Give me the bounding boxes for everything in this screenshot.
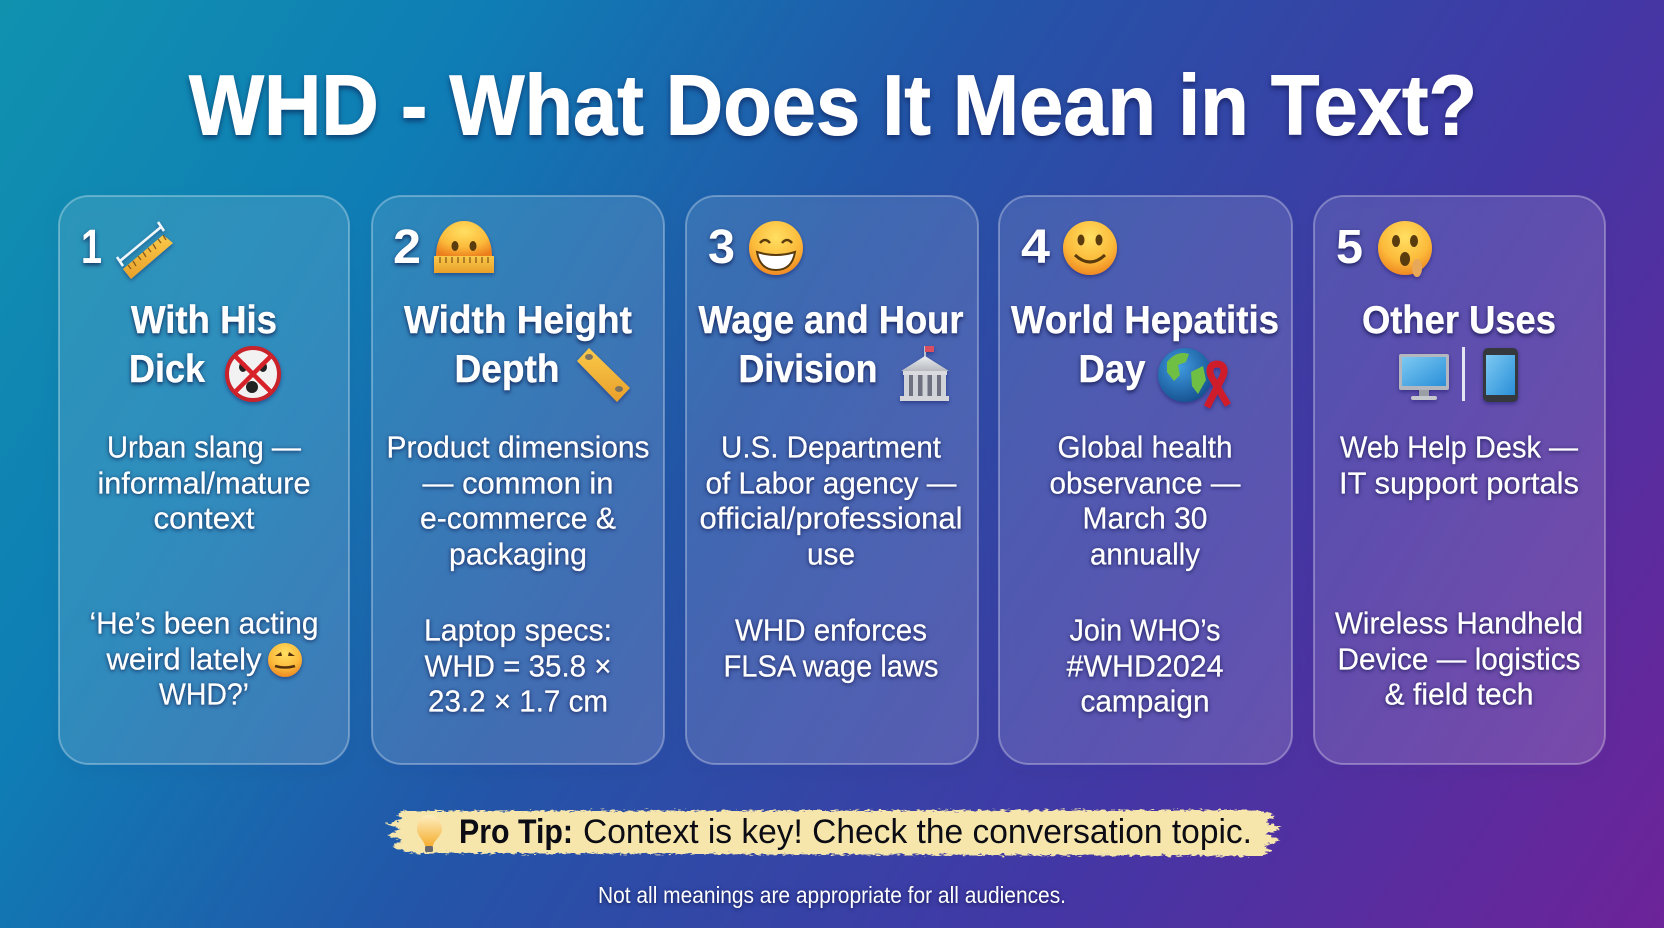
- example: Wireless Handheld: [1335, 605, 1583, 640]
- example: & field tech: [1384, 676, 1534, 711]
- example: 23.2 × 1.7 cm: [428, 683, 608, 718]
- heading: Wage and Hour: [698, 299, 964, 342]
- example: weird lately: [106, 641, 262, 676]
- heading: World Hepatitis: [1011, 299, 1279, 342]
- heading: Dick: [129, 348, 205, 391]
- description: packaging: [449, 536, 587, 571]
- icon: smiling face: [1063, 221, 1117, 275]
- example: [1335, 605, 1583, 711]
- footer note: Not all meanings are appropriate for all audiences.: [598, 882, 1066, 908]
- example: WHD = 35.8 ×: [424, 648, 612, 683]
- description: IT support portals: [1339, 465, 1579, 500]
- description: [700, 429, 962, 571]
- example: [724, 612, 938, 683]
- description: U.S. Department: [721, 429, 941, 464]
- number 3: 3: [708, 221, 735, 274]
- description: March 30: [1082, 500, 1208, 535]
- panel: with his dick: [59, 196, 349, 764]
- example: FLSA wage laws: [724, 648, 938, 683]
- icon: ruler with arrow: [117, 222, 173, 279]
- description: observance —: [1050, 465, 1240, 500]
- description: context: [154, 500, 255, 535]
- description: Global health: [1058, 429, 1232, 464]
- description: annually: [1090, 536, 1200, 571]
- description: e-commerce &: [420, 500, 616, 535]
- description: [1050, 429, 1240, 571]
- heading: [698, 299, 964, 391]
- example: [1066, 612, 1224, 718]
- description: [98, 429, 310, 535]
- heading: [1011, 299, 1279, 391]
- number 4: 4: [1021, 221, 1050, 274]
- number 5: 5: [1336, 221, 1363, 274]
- panel: width height depth: [372, 196, 664, 764]
- panel: world hepatitis day: [999, 196, 1292, 764]
- example: Join WHO’s: [1070, 612, 1220, 647]
- pro tip callout: [386, 810, 1282, 856]
- tip text: Pro Tip:: [459, 813, 573, 851]
- heading: Width Height: [404, 299, 632, 342]
- heading: [404, 299, 632, 391]
- heading: Division: [738, 348, 878, 391]
- icon: globe and red ribbon: [1158, 348, 1228, 407]
- example: Laptop specs:: [424, 612, 612, 647]
- example: WHD enforces: [735, 612, 927, 647]
- icon: prohibited face: [227, 348, 279, 400]
- icon: grinning face: [749, 221, 803, 275]
- icon: monitor: [1399, 354, 1449, 400]
- example: Device — logistics: [1338, 641, 1580, 676]
- heading: [129, 299, 277, 391]
- icon: smirking face: [268, 643, 302, 677]
- panel: wage and hour division: [686, 196, 978, 764]
- example: #WHD2024: [1066, 648, 1224, 683]
- example: ‘He’s been acting: [90, 605, 318, 640]
- description: informal/mature: [98, 465, 310, 500]
- description: — common in: [422, 465, 614, 500]
- description: use: [807, 536, 855, 571]
- description: official/professional: [700, 500, 962, 535]
- icon: face with tape measure: [434, 221, 494, 273]
- heading: Day: [1078, 348, 1146, 391]
- heading: Other Uses: [1362, 299, 1556, 342]
- tip text: Context is key! Check the conversation topic.: [583, 813, 1252, 851]
- description: Product dimensions: [386, 429, 650, 464]
- number 2: 2: [393, 221, 421, 274]
- icon: government building: [900, 346, 949, 401]
- title: WHD - What Does It Mean in Text?: [189, 58, 1477, 154]
- panel: other uses: [1314, 196, 1605, 764]
- example: campaign: [1080, 683, 1210, 718]
- description: Web Help Desk —: [1340, 429, 1578, 464]
- brush highlight: [386, 810, 1282, 856]
- example: WHD?’: [159, 676, 249, 711]
- description: [1339, 429, 1579, 500]
- heading: Depth: [454, 348, 560, 391]
- example: [90, 605, 318, 711]
- icon: surprised face with hand: [1378, 221, 1432, 277]
- description: Urban slang —: [107, 429, 301, 464]
- divider: [1462, 347, 1465, 401]
- example: [424, 612, 612, 718]
- icon: light bulb: [417, 815, 442, 852]
- icon: ruler: [577, 348, 630, 402]
- icon: phone: [1483, 348, 1518, 402]
- description: [386, 429, 650, 571]
- description: of Labor agency —: [706, 465, 956, 500]
- heading: With His: [131, 299, 277, 342]
- number 1: 1: [81, 221, 102, 274]
